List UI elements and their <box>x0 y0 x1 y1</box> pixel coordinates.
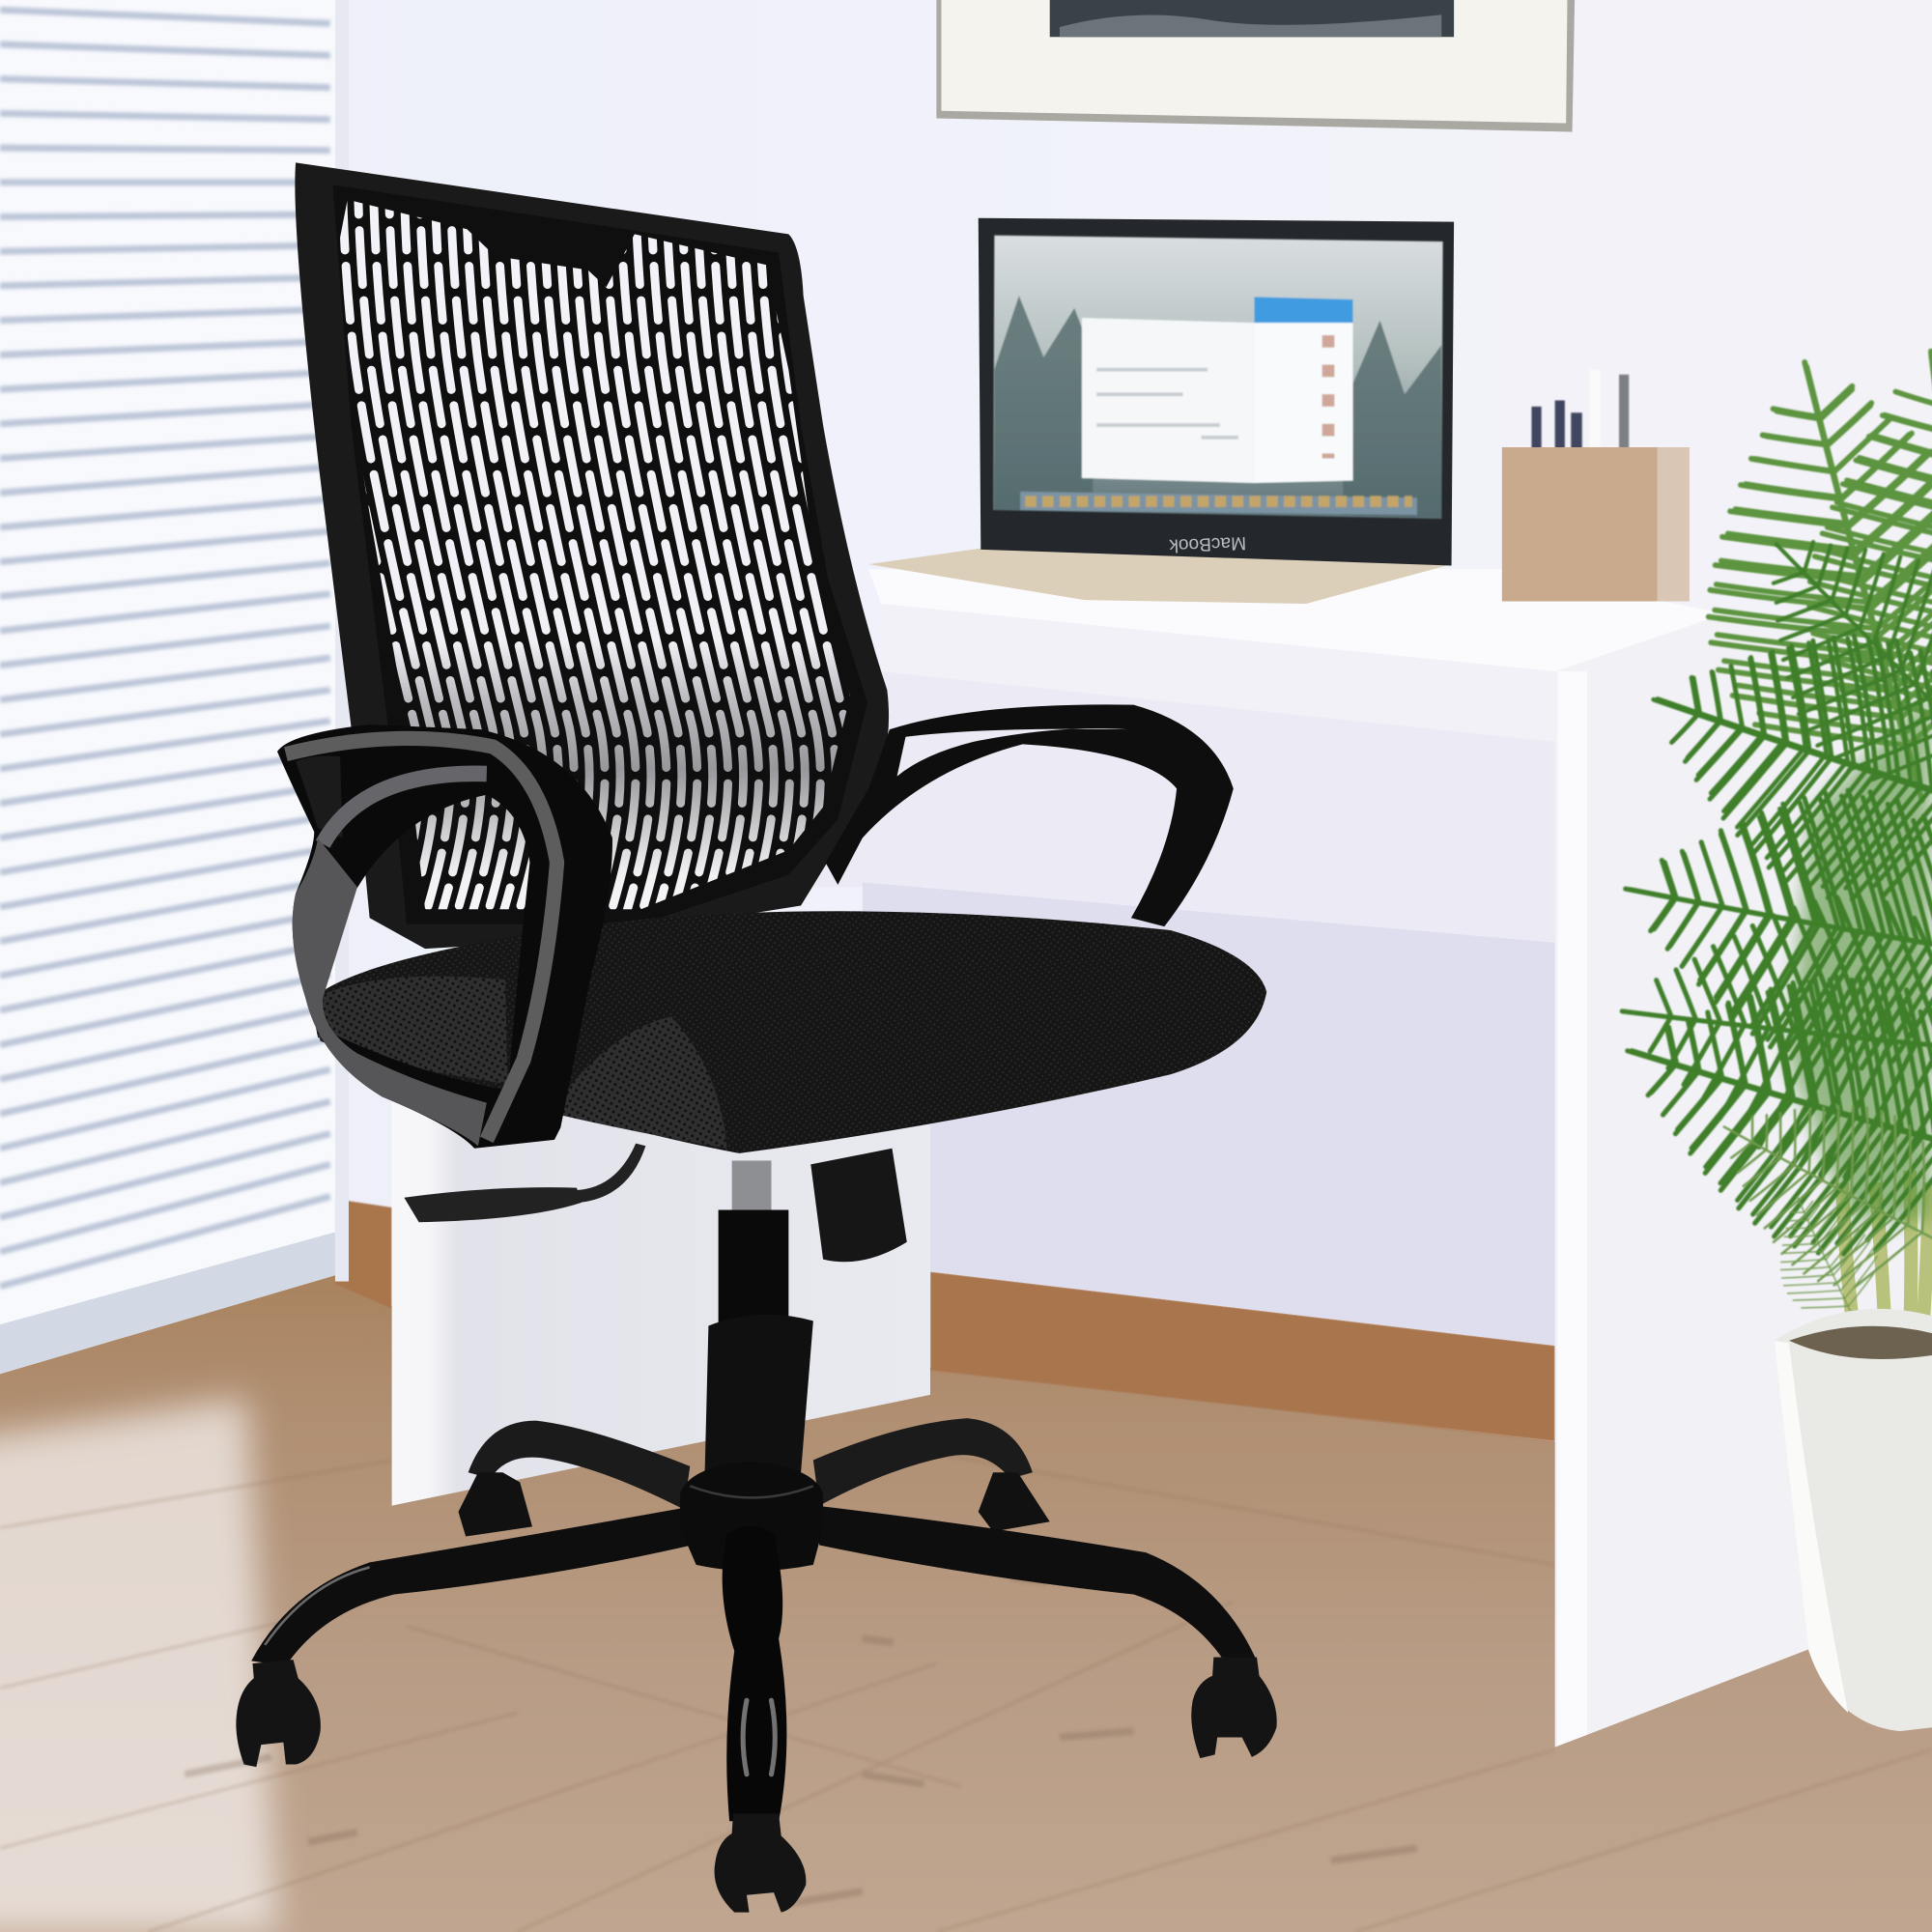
pencil holder <box>1502 370 1690 601</box>
plant pot <box>1775 1309 1932 1731</box>
back casters <box>458 1472 1050 1537</box>
laptop reflected label: MacBook <box>1169 532 1246 555</box>
plant foliage mass <box>1786 690 1932 1220</box>
back right leg <box>813 1418 1033 1506</box>
desk top and apron <box>868 569 1725 742</box>
plant stems <box>1842 1171 1929 1337</box>
lower fronds <box>1681 1048 1932 1343</box>
laptop <box>868 218 1454 604</box>
gas cylinder <box>705 1161 813 1472</box>
laptop screen <box>993 236 1443 519</box>
chair base legs <box>236 1161 1277 1913</box>
right armrest <box>826 704 1234 926</box>
armrest lower grey panel <box>293 838 487 1146</box>
plant <box>1588 321 1932 1343</box>
wall skirting under desk <box>930 1271 1555 1441</box>
desk left leg <box>392 1084 930 1506</box>
backrest <box>265 160 889 949</box>
front leg <box>723 1526 786 1821</box>
office chair <box>236 160 1277 1913</box>
window reflection on floor <box>0 1399 277 1932</box>
laptop lid <box>979 218 1454 565</box>
laptop base <box>868 549 1452 604</box>
back left leg <box>469 1421 690 1509</box>
desk right leg <box>1555 613 1932 1747</box>
front leg highlights <box>743 1700 775 1775</box>
armrest window <box>296 756 343 838</box>
blind slat lines <box>0 10 330 1287</box>
left leg <box>251 1506 702 1665</box>
middle caster <box>715 1814 806 1913</box>
left caster <box>236 1660 321 1767</box>
skirting near window <box>335 1199 392 1309</box>
right caster <box>1191 1658 1277 1758</box>
floor <box>0 1275 1932 1932</box>
hub <box>680 1462 823 1571</box>
area behind desk <box>813 666 1555 1346</box>
tilt knob <box>810 1149 907 1262</box>
right leg <box>815 1506 1257 1665</box>
middle fronds <box>1588 466 1932 1295</box>
upper fronds <box>1647 321 1932 842</box>
backrest perforations <box>340 201 850 910</box>
blind bottom rail <box>0 1233 335 1374</box>
window blinds <box>0 0 349 1374</box>
front casters <box>236 1658 1277 1913</box>
left armrest <box>277 724 612 1149</box>
height lever <box>404 1144 645 1222</box>
armrest grey highlight bands <box>286 738 557 1140</box>
framed picture <box>936 0 1575 131</box>
seat cushion <box>310 911 1266 1153</box>
